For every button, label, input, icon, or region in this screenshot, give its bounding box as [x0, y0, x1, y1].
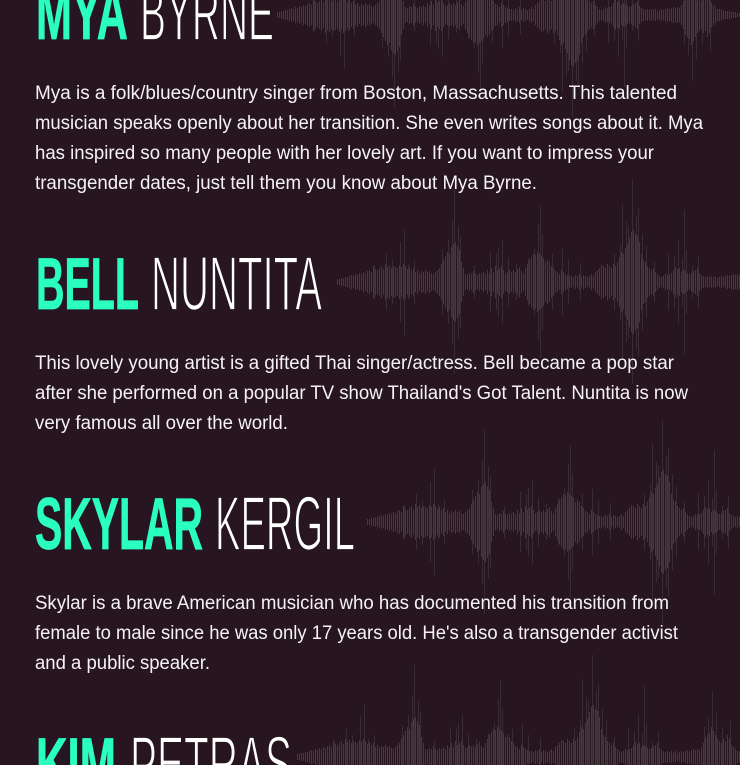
- heading: Skylar Kergil: SKYLAR: [35, 482, 203, 565]
- text: Bell Nuntita bio: after she performed on a popular TV show Thailand's Got Talent. Nuntita is now: [35, 383, 688, 404]
- waveform: Mya Byrne: [278, 0, 740, 117]
- heading: Bell Nuntita: NUNTITA: [151, 241, 322, 327]
- text: Bell Nuntita bio: [35, 353, 688, 434]
- text: Skylar Kergil bio: and a public speaker.: [35, 653, 210, 674]
- heading: Bell Nuntita: [36, 241, 322, 327]
- text: Mya Byrne bio: Mya is a folk/blues/country singer from Boston, Massachusetts. This talented: [35, 83, 677, 104]
- heading: Bell Nuntita: BELL: [36, 242, 139, 325]
- text: Mya Byrne bio: musician speaks openly about her transition. She even writes songs about it. Mya: [35, 113, 703, 134]
- text: Skylar Kergil bio: Skylar is a brave American musician who has documented his transition from: [35, 593, 669, 614]
- text: Mya Byrne bio: transgender dates, just tell them you know about Mya Byrne.: [35, 173, 537, 194]
- text: Mya Byrne bio: [35, 83, 703, 194]
- waveform: Skylar Kergil: [368, 420, 740, 624]
- text: Skylar Kergil bio: female to male since he was only 17 years old. He's also a transgender activist: [35, 623, 679, 644]
- text: Bell Nuntita bio: This lovely young artist is a gifted Thai singer/actress. Bell became a pop star: [35, 353, 675, 374]
- heading: Kim Petras: [36, 721, 292, 765]
- text: Skylar Kergil bio: [35, 593, 679, 674]
- waveform: Bell Nuntita: [338, 180, 740, 384]
- text: KERGIL: [215, 481, 355, 567]
- heading: Mya Byrne: [36, 0, 274, 57]
- waveform: Kim Petras: [298, 655, 740, 765]
- text: Mya Byrne bio: has inspired so many people with her lovely art. If you want to impress your: [35, 143, 655, 164]
- text: Bell Nuntita bio: very famous all over the world.: [35, 413, 288, 434]
